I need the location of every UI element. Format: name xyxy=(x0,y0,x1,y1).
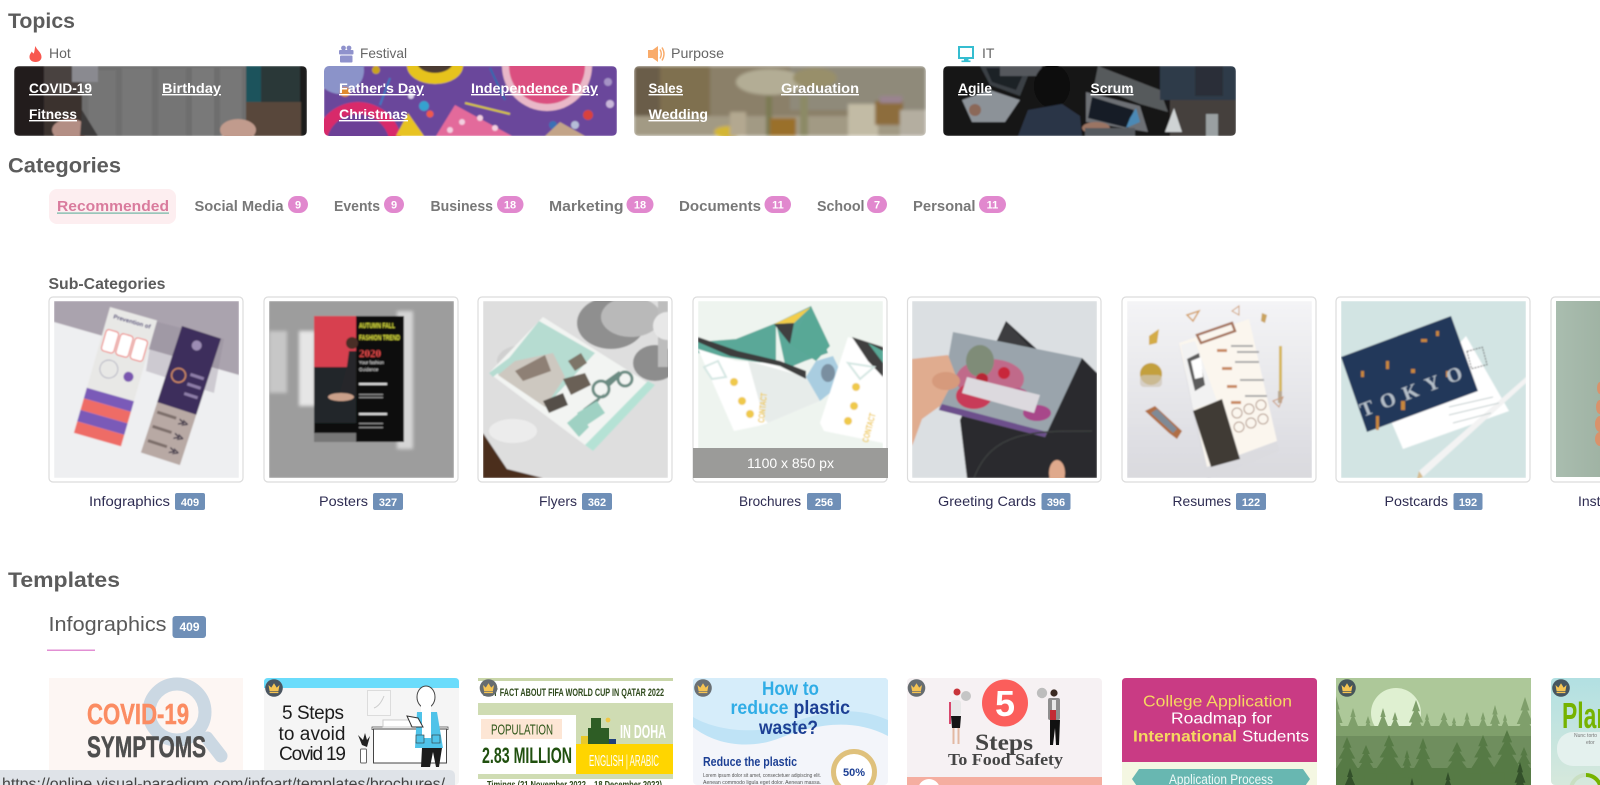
icon: flame xyxy=(30,46,42,62)
count badge: 396: 396 xyxy=(1047,497,1065,509)
text: small copy xyxy=(1574,733,1597,746)
template card: COVID-19 Symptoms xyxy=(49,678,243,785)
chart: ring xyxy=(1571,775,1600,785)
links: Hot: Birthday xyxy=(162,80,221,96)
text: How to reduce plastic waste: How to xyxy=(762,679,819,700)
tab: Personal: 11 xyxy=(987,200,998,212)
tab: Business: Business xyxy=(430,198,493,215)
count badge: 409 xyxy=(175,493,205,510)
tab: Documents: 11 xyxy=(772,200,784,212)
chart: 50% ring xyxy=(834,752,874,785)
icon: speaker xyxy=(648,46,664,62)
thumbnail: poster on concrete wall: Guidance xyxy=(359,367,379,372)
topic card photo: people with laptops xyxy=(943,64,1236,136)
subcategory: Postcards xyxy=(1336,297,1530,510)
thumbnail: hand on sage background xyxy=(1556,301,1600,477)
heading: Sub-Categories: Sub-Categories xyxy=(48,276,166,293)
count badge: 327: 327 xyxy=(379,497,397,509)
subcategory: Resumes xyxy=(1122,297,1316,510)
size overlay: 1100 x 850 px xyxy=(693,448,888,478)
icon: magnifier xyxy=(149,684,221,756)
template card: College Application Roadmap xyxy=(1122,678,1317,785)
cloud xyxy=(1557,732,1600,766)
text: How to reduce plastic waste xyxy=(730,679,850,739)
count badge: 409 xyxy=(172,616,206,638)
count badge: 362 xyxy=(582,493,612,510)
name: Brochures: Brochures xyxy=(739,493,801,509)
count badge: 409: 409 xyxy=(179,620,200,634)
text: lorem ipsum xyxy=(703,773,821,785)
template card: Plants (cut off) xyxy=(1551,678,1600,785)
tab: Events: Events xyxy=(334,198,380,215)
tab: Events xyxy=(334,196,404,215)
block: in Doha: IN DOHA xyxy=(620,722,666,742)
subcategory: Greeting Cards xyxy=(908,297,1101,510)
topic group: Purpose xyxy=(634,45,926,138)
thumbnail: poster on concrete wall xyxy=(269,301,454,478)
label: Hot: Hot xyxy=(49,45,71,61)
tab: Social Media: 9 xyxy=(295,200,301,212)
count badge: 396 xyxy=(1042,493,1070,510)
text: How to reduce plastic waste: plastic xyxy=(794,698,850,719)
links: Purpose xyxy=(648,80,859,122)
thumbnail: infographic mockup: ≫ xyxy=(176,417,190,430)
tab: Marketing: Marketing xyxy=(549,198,624,215)
section title: Infographics: Infographics xyxy=(48,614,166,636)
name: Greeting Cards: Greeting Cards xyxy=(938,493,1036,509)
template card: 5 Steps to Food Safety xyxy=(907,678,1102,785)
tab: Personal xyxy=(913,196,1006,215)
thumbnail: tri-fold brochure xyxy=(698,301,883,448)
section title: Infographics xyxy=(47,614,206,651)
count badge: 327 xyxy=(373,493,403,510)
block: in Doha xyxy=(576,718,673,774)
name: Resumes: Resumes xyxy=(1172,493,1231,509)
banner: Application Process xyxy=(1132,769,1310,785)
links: IT: Scrum xyxy=(1090,80,1134,96)
badge: crown xyxy=(908,679,925,697)
text: How to reduce plastic waste: reduce xyxy=(730,698,788,719)
tab: Recommended: Recommended xyxy=(57,198,169,215)
topic card photo: party table xyxy=(324,66,617,136)
template card: forest xyxy=(1325,678,1539,785)
block: population: POPULATION xyxy=(491,722,553,738)
subcategory: Infographics xyxy=(49,297,243,510)
links: Purpose: Wedding xyxy=(648,106,708,122)
links: Hot: COVID-19 xyxy=(29,80,92,96)
subcategory: Instagram (cut off) xyxy=(1551,297,1600,509)
topic group: IT xyxy=(943,45,1236,136)
topic group: Festival xyxy=(324,46,617,136)
badge: crown xyxy=(694,679,712,697)
thumbnail: flyer on marble table xyxy=(483,301,668,478)
count badge: 122: 122 xyxy=(1242,497,1260,509)
illustration: waiter xyxy=(1037,688,1060,745)
links: Festival: Independence Day xyxy=(471,80,598,96)
count badge: 256 xyxy=(807,493,841,510)
heading: Templates: Templates xyxy=(8,569,120,592)
tab: Personal: Personal xyxy=(913,198,976,215)
icon: gift xyxy=(339,46,354,62)
category tabs xyxy=(49,189,1006,224)
tab: Business xyxy=(430,196,524,215)
text: How to reduce plastic waste: waste? xyxy=(758,718,818,739)
thumbnail: infographic mockup: Prevention of xyxy=(112,314,152,331)
decoration: white circle xyxy=(918,779,940,785)
links: IT: Agile xyxy=(958,80,992,96)
count badge: 256: 256 xyxy=(815,497,833,509)
text: 5 Steps to avoid Covid 19 xyxy=(278,703,346,765)
tab: Recommended xyxy=(49,189,176,224)
links: Hot xyxy=(29,80,221,122)
tab: Business: 18 xyxy=(504,200,516,212)
badge: crown xyxy=(265,679,283,697)
middle band xyxy=(1336,736,1531,785)
text: International Students: Students xyxy=(1242,728,1309,746)
thumbnail: greeting card and envelope xyxy=(912,301,1097,478)
text: Steps: Steps xyxy=(975,730,1033,755)
thumbnail: infographic mockup: ≫ xyxy=(167,445,181,459)
topic group: Hot xyxy=(14,45,307,141)
illustration: doctor at desk xyxy=(358,686,448,767)
links: IT xyxy=(958,80,1134,96)
text: International Students: International xyxy=(1133,728,1237,746)
text: College Application: College Application xyxy=(1143,694,1292,710)
text: COVID-19: COVID-19 xyxy=(87,699,189,731)
thumbnail: poster on concrete wall: AUTUMN FALL xyxy=(359,323,396,330)
text: 5 Steps to avoid Covid 19: Covid 19 xyxy=(279,744,346,765)
thumbnail: tri-fold brochure: CONTACT xyxy=(756,392,769,423)
far tree line xyxy=(1325,696,1539,785)
name: Postcards: Postcards xyxy=(1384,493,1448,509)
thumbnail: Tokyo postcard: TOKYO xyxy=(1357,362,1466,422)
icon: monitor xyxy=(959,47,973,62)
icon: red circle with 5: 5 xyxy=(995,683,1015,724)
heading: Categories: Categories xyxy=(8,154,121,178)
text: To Food Safety: To Food Safety xyxy=(948,750,1064,769)
name: Posters: Posters xyxy=(319,493,368,509)
tab: Marketing: 18 xyxy=(634,200,646,212)
thumbnail: Tokyo postcard xyxy=(1341,301,1526,478)
label: IT: IT xyxy=(982,45,995,61)
name: Flyers: Flyers xyxy=(539,493,577,509)
tab: School: 7 xyxy=(874,200,880,212)
name: Infographics: Infographics xyxy=(89,493,170,509)
count badge: 192 xyxy=(1454,493,1482,510)
tab: Documents: Documents xyxy=(679,198,761,215)
heading: Topics: Topics xyxy=(8,10,75,33)
count badge: 362: 362 xyxy=(588,497,606,509)
text: SYMPTOMS: SYMPTOMS xyxy=(87,731,206,764)
topic card photo: newspaper xyxy=(14,66,307,141)
text: Reduce the plastic: Reduce the plastic xyxy=(703,755,797,769)
moon xyxy=(1371,688,1421,738)
thumbnail: infographic mockup xyxy=(54,301,239,478)
links: Purpose: Graduation xyxy=(781,80,859,96)
text: International Students xyxy=(1133,728,1309,746)
text: Roadmap for: Roadmap for xyxy=(1171,710,1273,728)
links: Hot: Fitness xyxy=(29,106,77,122)
count badge: 122 xyxy=(1236,493,1266,510)
subcategory: Brochures xyxy=(693,297,888,510)
status bar tooltip: link URL xyxy=(0,770,455,785)
thumbnail: poster on concrete wall: 2020 xyxy=(359,348,382,360)
text: title: KEY FACT ABOUT FIFA WORLD CUP IN QATAR 2022 xyxy=(483,687,664,699)
thumbnail: tri-fold brochure: CONTACT xyxy=(860,412,878,444)
links: Festival: Christmas xyxy=(339,106,408,122)
tab: Documents xyxy=(679,196,791,215)
badge: crown xyxy=(1338,679,1356,697)
label: Festival: Festival xyxy=(360,45,407,61)
subcategory: Flyers xyxy=(478,297,681,510)
text: small copy: etor xyxy=(1586,740,1595,746)
tab: School xyxy=(817,196,887,215)
badge: crown xyxy=(1552,679,1570,697)
template card: reduce plastic waste xyxy=(693,678,888,785)
size overlay: 1100 x 850 px: 1100 x 850 px xyxy=(747,455,834,471)
template card: 5 Steps to avoid Covid 19 xyxy=(264,678,459,785)
illustration: waitress xyxy=(949,688,971,744)
topic card photo: wedding table xyxy=(634,66,926,138)
block: in Doha: ENGLISH | ARABIC xyxy=(589,753,659,770)
near tree line xyxy=(1333,730,1535,785)
block: population xyxy=(478,715,576,774)
thumbnail: poster on concrete wall: FASHION TREND xyxy=(359,335,400,342)
template card: FIFA World Cup facts xyxy=(478,678,673,785)
thumbnail: poster on concrete wall: Your fashion xyxy=(359,360,384,365)
text: lorem ipsum: Lorem ipsum dolor sit amet, consectetuer adipiscing elit. xyxy=(703,773,821,779)
links: Festival: Father's Day xyxy=(339,80,424,96)
tab: Marketing xyxy=(549,196,654,215)
tab: Events: 9 xyxy=(391,200,397,212)
chart: 50% ring: 50% xyxy=(843,767,865,779)
thumbnail: resume on clipboard xyxy=(1127,302,1312,478)
label: Purpose: Purpose xyxy=(671,45,724,61)
links: Purpose: Sales xyxy=(648,80,683,96)
subcategory: Posters xyxy=(264,297,458,510)
count badge: 409: 409 xyxy=(181,497,199,509)
block: population: 2.83 MILLION xyxy=(482,743,572,768)
thumbnail: infographic mockup: ≫ xyxy=(172,431,185,445)
tab: School: School xyxy=(817,198,864,215)
darkest foreground trees xyxy=(1340,762,1530,785)
tab: Social Media: Social Media xyxy=(194,198,284,215)
text: 5 Steps to avoid Covid 19: 5 Steps xyxy=(282,703,344,724)
count badge: 192: 192 xyxy=(1459,497,1477,509)
links: Festival xyxy=(339,80,598,122)
badge: crown xyxy=(480,679,497,697)
text: small copy: Nunc torto xyxy=(1574,733,1597,739)
text: 5 Steps to avoid Covid 19: to avoid xyxy=(278,724,346,745)
icon: red circle with 5 xyxy=(982,680,1028,726)
